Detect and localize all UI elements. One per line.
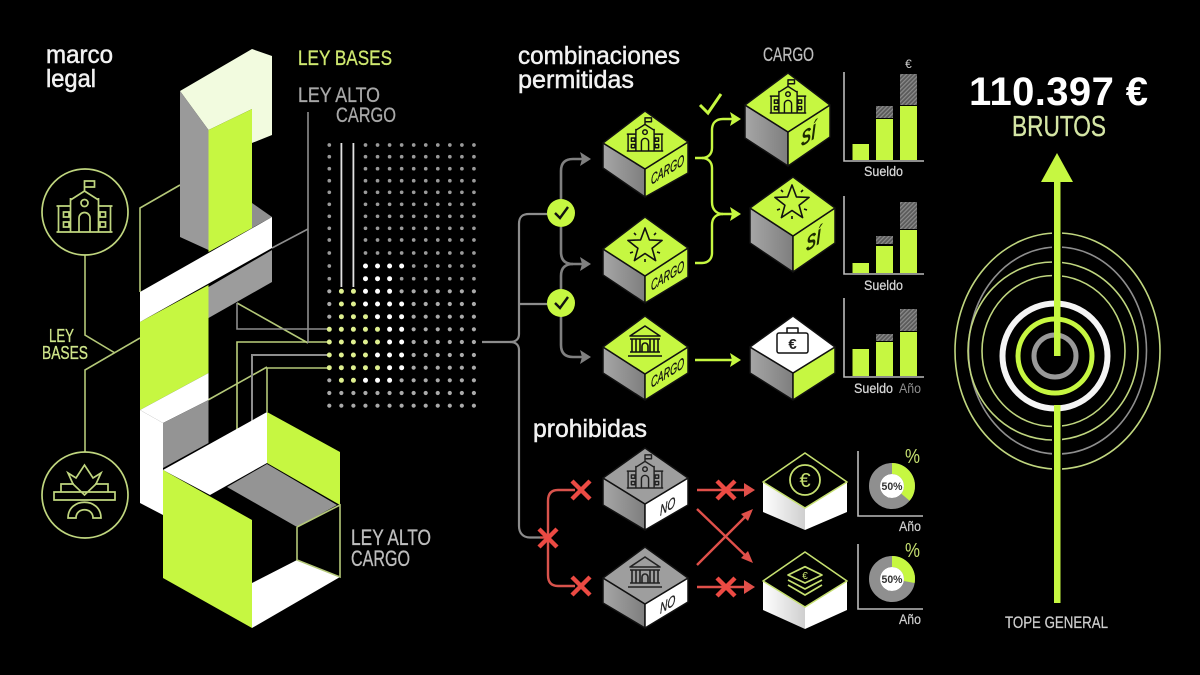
label: ley bases title: LEY BASES: [298, 47, 392, 70]
heading: combinaciones permitidas: [518, 42, 680, 94]
cube: school no: NO: [660, 493, 676, 520]
check badge upper: [547, 199, 575, 227]
red arrows right: [697, 481, 755, 596]
title: marco legal: legal: [46, 65, 96, 93]
cube: institution no: NO: [660, 591, 676, 618]
label: ley alto cargo block: [351, 525, 431, 571]
cube: star si: [750, 177, 835, 272]
cube: star cargo: CARGO: [651, 257, 684, 295]
panel: prohibidas: [533, 415, 923, 629]
bar chart: school: [844, 57, 924, 179]
red crosses left: [539, 481, 590, 595]
connector lines: ley bases: [85, 185, 329, 452]
arrow: upward limit: [1041, 153, 1073, 603]
cube: school cargo: [603, 111, 688, 197]
label: cargo column: CARGO: [763, 45, 814, 66]
cube: briefcase: [750, 316, 835, 400]
donut chart: upper: 50%: [882, 481, 903, 493]
bar chart: institution: Año: [899, 380, 921, 396]
cube: star cargo: [603, 217, 688, 303]
dot matrix: [329, 145, 475, 406]
green brace arrows: [695, 112, 741, 367]
label: ley alto cargo block: CARGO: [351, 546, 410, 571]
heading: combinaciones permitidas: permitidas: [518, 66, 634, 94]
heading: combinaciones permitidas: combinaciones: [518, 42, 680, 70]
label: ley alto cargo block: LEY ALTO: [351, 525, 431, 550]
label: ley bases: LEY: [49, 326, 74, 346]
donut chart: lower: %: [905, 540, 920, 562]
gray arrows: [561, 152, 591, 364]
cube: school cargo: CARGO: [651, 151, 684, 189]
panel: combinaciones permitidas: [482, 42, 924, 538]
donut chart: lower: Año: [899, 611, 921, 627]
cube: euro coin: €: [799, 470, 811, 492]
title: marco legal: marco: [46, 41, 113, 69]
cube: institution cargo: CARGO: [651, 354, 684, 392]
gray branching connector: [482, 214, 548, 538]
connector lines: ley alto cargo: [237, 112, 329, 438]
heading: prohibidas: prohibidas: [533, 415, 647, 443]
donut chart: upper: [858, 446, 923, 534]
label: ley alto cargo title: [298, 84, 396, 127]
cube: institution cargo: [603, 316, 688, 400]
icon: emblem circle: [42, 452, 128, 538]
cube: school no: [603, 448, 688, 530]
donut chart: upper: %: [905, 446, 920, 468]
donut chart: lower: [858, 540, 923, 627]
cube: institution no: [603, 547, 688, 628]
cube: school si: [745, 73, 830, 166]
cube: euro stack: €: [802, 571, 808, 582]
label: brutos: BRUTOS: [1012, 111, 1106, 143]
label: ley bases: [42, 326, 88, 363]
check badge lower: [547, 289, 575, 317]
donut chart: lower: 50%: [882, 574, 903, 586]
label: tope general: TOPE GENERAL: [1005, 613, 1108, 632]
panel: tope general: [955, 70, 1160, 632]
check mark: [700, 94, 721, 113]
cube: euro coin: [763, 453, 847, 530]
vertical dot lines: [341, 143, 353, 287]
bar chart: institution: Sueldo: [854, 380, 893, 396]
label: ley alto cargo title: LEY ALTO: [298, 84, 380, 107]
isometric structure: ley bases column: [140, 49, 272, 515]
red branching connector: [540, 490, 575, 586]
label: ley alto cargo title: CARGO: [336, 104, 396, 127]
isometric structure: ley alto cargo block: [163, 412, 340, 628]
value: 110.397 euros: 110.397 €: [969, 70, 1148, 114]
title: marco legal: [46, 41, 113, 93]
cube: school si: SÍ: [801, 119, 818, 152]
cube: star si: SÍ: [806, 224, 823, 257]
bar chart: star: Sueldo: [864, 277, 903, 293]
bar chart: school: Sueldo: [864, 163, 903, 179]
label: ley bases: BASES: [42, 343, 88, 363]
bar chart: star: [844, 196, 924, 293]
target rings: [955, 225, 1160, 480]
donut chart: upper: Año: [899, 518, 921, 534]
bar chart: institution: [844, 298, 924, 396]
panel: marco legal: [42, 41, 475, 628]
cube: euro stack: [763, 552, 847, 629]
bar chart: school: €: [905, 57, 912, 71]
icon: school circle: [42, 169, 128, 255]
cube: briefcase: €: [788, 336, 797, 353]
